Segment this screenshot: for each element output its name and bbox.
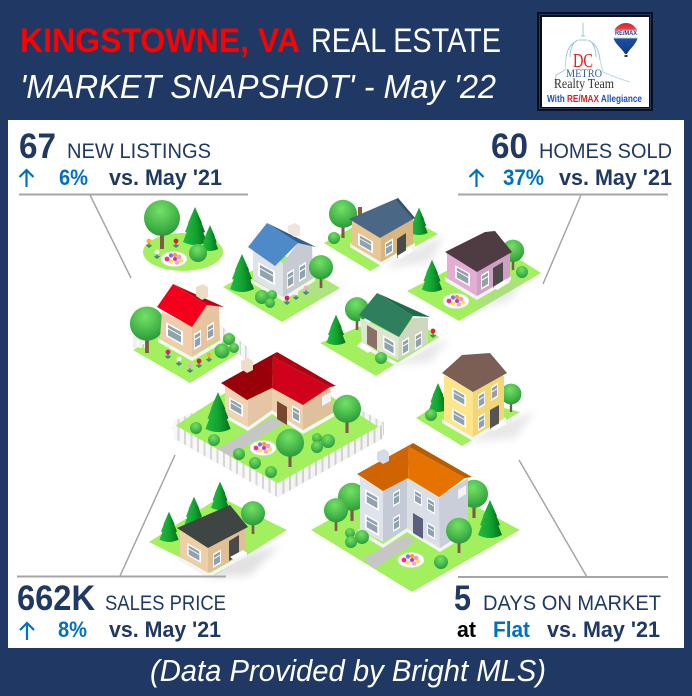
arrow up	[470, 170, 484, 187]
house: large grey with orange roof	[311, 443, 520, 592]
stat: new listings: NEW LISTINGS	[67, 140, 211, 163]
stat: homes sold	[458, 127, 672, 284]
footer source note: (Data Provided by Bright MLS)	[150, 653, 546, 688]
white content panel	[8, 120, 684, 648]
stat: days on market: 5	[454, 579, 471, 618]
arrow up	[20, 623, 34, 640]
stat: sales price: SALES PRICE	[105, 592, 226, 615]
chimney	[288, 223, 300, 237]
chimney	[196, 284, 208, 300]
stat: new listings: vs. May '21	[109, 165, 222, 190]
house: yellow with brown roof	[416, 353, 535, 446]
stat: homes sold: HOMES SOLD	[539, 140, 672, 163]
stat: sales price: 8%	[58, 617, 87, 642]
stat: sales price	[17, 455, 226, 642]
arrow up	[20, 170, 34, 187]
subtitle: 'MARKET SNAPSHOT' - May '22	[20, 68, 496, 105]
stat: days on market	[454, 460, 668, 642]
stat: sales price: 662K	[17, 579, 95, 618]
house: dark roof	[149, 482, 287, 578]
house: pink with dark roof	[407, 231, 541, 321]
house: slate blue roof	[324, 198, 445, 271]
logo: DC Metro Realty Team: With RE/MAX Allegiance	[547, 94, 642, 105]
stat: days on market: at	[457, 617, 477, 642]
stat: days on market: DAYS ON MARKET	[483, 592, 661, 615]
house: red roof with fence	[130, 284, 249, 383]
chimney	[377, 449, 389, 464]
icon: balloon: RE/MAX	[615, 31, 637, 37]
fence	[133, 331, 249, 355]
stat: days on market: vs. May '21	[547, 617, 660, 642]
stat: days on market: Flat	[493, 617, 531, 642]
house: blue roof	[223, 223, 345, 322]
icon: capitol dome	[555, 23, 630, 84]
house: green roof	[320, 293, 450, 376]
stat: homes sold: vs. May '21	[559, 165, 672, 190]
stat: new listings: 6%	[59, 165, 88, 190]
logo: DC Metro Realty Team	[537, 12, 653, 111]
front fence	[173, 431, 383, 491]
stat: new listings: 67	[19, 127, 56, 166]
title: KINGSTOWNE, VA	[20, 22, 300, 60]
back fence	[173, 406, 384, 429]
stat: homes sold: 37%	[503, 165, 544, 190]
logo: DC Metro Realty Team: METRO	[566, 66, 602, 80]
title: REAL ESTATE	[311, 22, 501, 60]
house: large red roof with fenced yard	[172, 352, 384, 492]
title	[20, 22, 501, 60]
stat: sales price: vs. May '21	[109, 617, 221, 642]
logo: DC Metro Realty Team: DC	[573, 50, 593, 72]
chimney	[241, 358, 253, 373]
garden with trees and flowers	[143, 200, 223, 271]
stat: new listings	[19, 127, 248, 278]
path	[207, 417, 284, 462]
logo: DC Metro Realty Team: Realty Team	[554, 77, 614, 92]
stat: homes sold: 60	[491, 127, 528, 166]
